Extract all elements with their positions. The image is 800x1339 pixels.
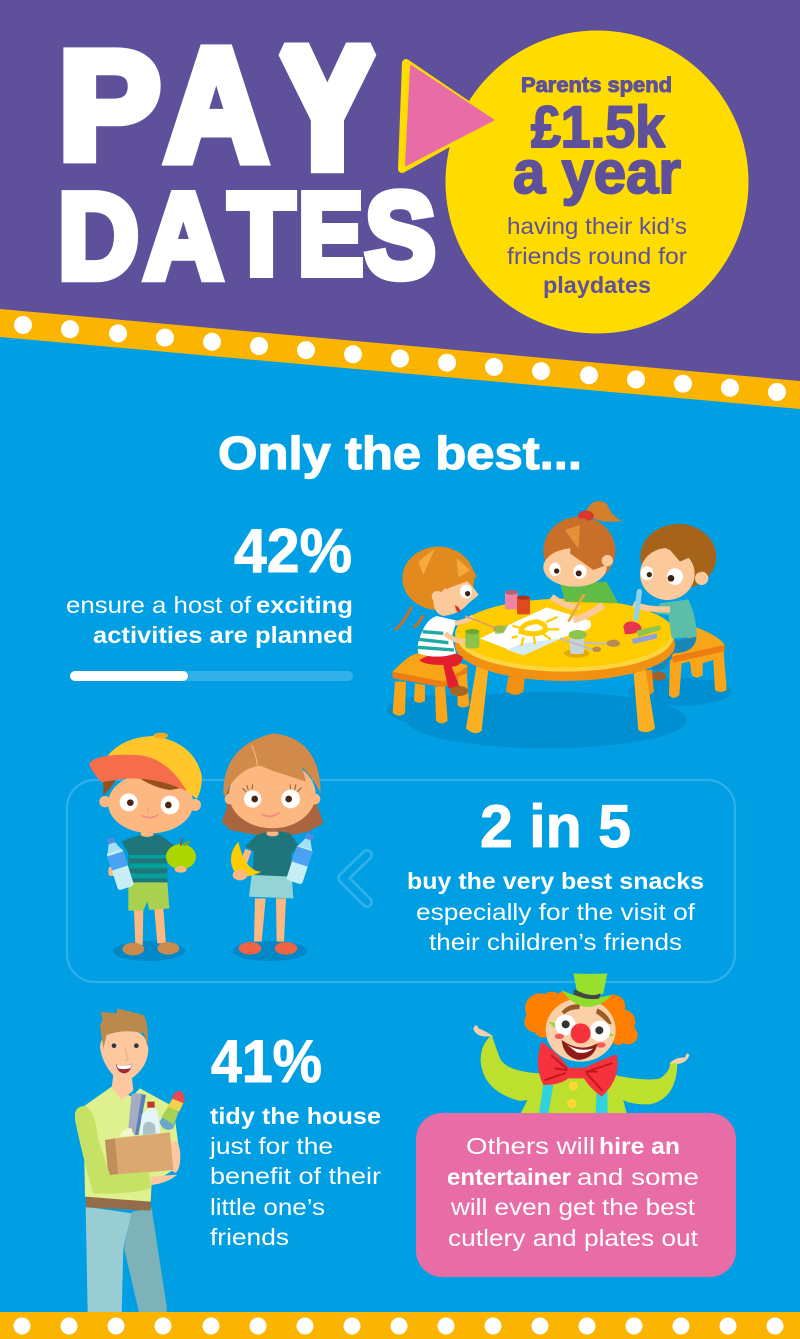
stat: 2 in 5 snacks: especially for the visit of: [416, 899, 696, 925]
progress bar: 42 percent: [70, 671, 353, 681]
stat: 41 percent tidy: tidy the house: [210, 1103, 381, 1129]
stat: 41 percent tidy: friends: [210, 1224, 289, 1250]
illustration: children painting at a table: [387, 501, 732, 748]
stat: 42 percent activities: activities are planned: [93, 622, 353, 648]
title: PAY DATES: S: [365, 168, 436, 304]
callout: yellow circle with spend statistic: Parents spend: [521, 74, 672, 97]
heading: only the best: Only the best...: [218, 427, 582, 479]
callout: pink entertainer panel: cutlery and plates out: [448, 1225, 699, 1251]
callout: pink entertainer panel: and some: [577, 1164, 699, 1190]
header panel: purple background: [0, 0, 800, 385]
callout: yellow circle with spend statistic: [446, 30, 748, 334]
stat: 42 percent activities: [66, 517, 353, 648]
stat: 41 percent tidy: little one’s: [210, 1194, 325, 1220]
illustration: man holding a box of cleaning supplies: [75, 1008, 185, 1312]
callout: pink entertainer panel: [416, 1113, 736, 1277]
title: PAY DATES: A: [144, 167, 223, 304]
stat: 2 in 5 snacks: [407, 793, 704, 955]
callout: yellow circle with spend statistic: playdates: [543, 272, 651, 298]
diagonal dotted band: [0, 309, 800, 409]
title: PAY DATES: [58, 16, 436, 304]
stat: 41 percent tidy: 41%: [211, 1028, 322, 1095]
panel: snacks outline box: [67, 780, 735, 982]
callout: pink entertainer panel: Others will: [466, 1133, 595, 1159]
stat: 2 in 5 snacks: their children’s friends: [429, 929, 682, 955]
stat: 2 in 5 snacks: 2 in 5: [480, 793, 631, 860]
callout: yellow circle with spend statistic: friends round for: [507, 243, 687, 269]
stat: 41 percent tidy: [209, 1028, 381, 1250]
stat: 41 percent tidy: benefit of their: [210, 1163, 381, 1189]
callout: pink entertainer panel: hire an: [599, 1133, 680, 1159]
illustration: clown: [473, 973, 689, 1113]
callout: pink entertainer panel: entertainer: [447, 1164, 571, 1190]
stat: 42 percent activities: 42%: [234, 517, 352, 586]
illustration: boy and girl with snacks: [89, 733, 323, 961]
stat: 42 percent activities: ensure a host of: [66, 592, 252, 618]
callout: yellow circle with spend statistic: £1.5k: [531, 95, 666, 160]
stat: 42 percent activities: exciting: [256, 592, 353, 618]
stat: 41 percent tidy: just for the: [209, 1133, 333, 1159]
title: PAY DATES: A: [165, 16, 268, 195]
title: PAY DATES: D: [58, 168, 139, 304]
title: PAY DATES: P: [58, 20, 161, 191]
callout: yellow circle with spend statistic: having their kid’s: [507, 213, 687, 239]
title: PAY DATES: T: [228, 169, 294, 299]
title: PAY DATES: Y: [282, 16, 373, 201]
stat: 2 in 5 snacks: buy the very best snacks: [407, 868, 704, 894]
icon: chevron arrow: [343, 855, 367, 902]
bottom dotted band: [0, 1312, 800, 1339]
icon: pink play triangle: [402, 63, 493, 169]
title: PAY DATES: E: [298, 169, 363, 299]
callout: yellow circle with spend statistic: a year: [513, 139, 681, 206]
callout: pink entertainer panel: will even get the best: [450, 1194, 696, 1220]
